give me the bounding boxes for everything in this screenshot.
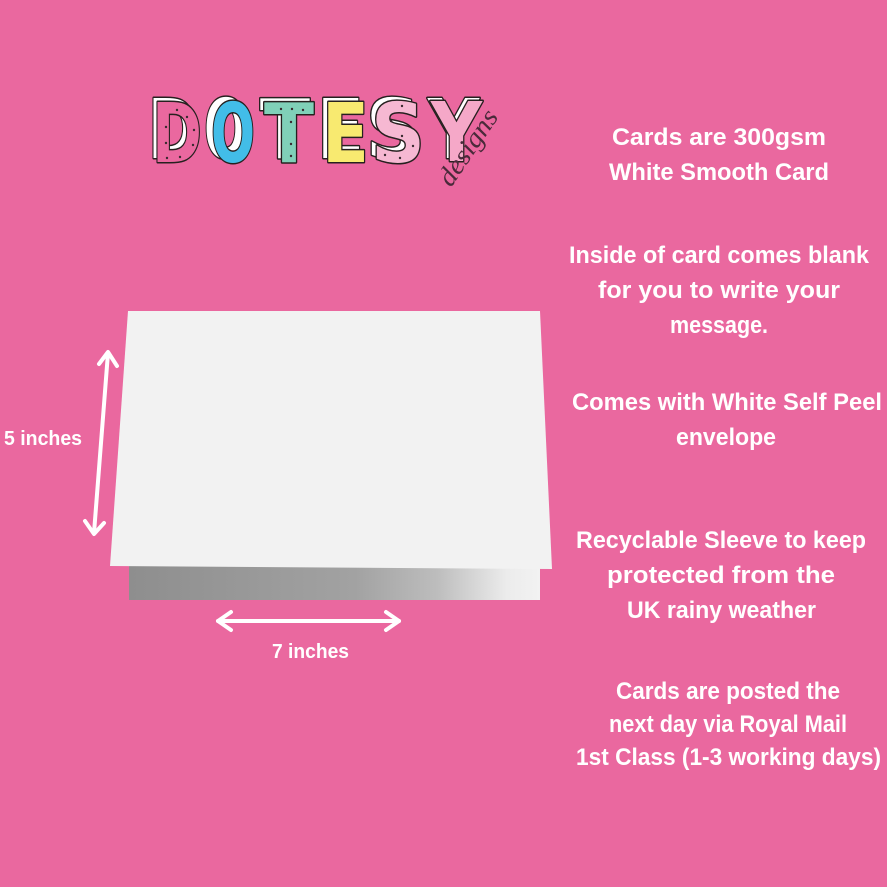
- text block: inside of card: for you to write your: [598, 277, 840, 304]
- logo: Dotesy Designs: [148, 83, 504, 191]
- card inner back page: [129, 560, 540, 600]
- logo letter S: S: [366, 83, 420, 178]
- logo letter O: O: [204, 83, 248, 178]
- logo letter Y: Y: [430, 86, 483, 181]
- logo letter D: D: [148, 83, 198, 178]
- logo script word: designs: designs: [431, 103, 504, 191]
- text block: card stock: White Smooth Card: [609, 159, 829, 186]
- logo letter T: T: [260, 83, 310, 178]
- logo letter T: T: [264, 87, 314, 182]
- logo letter S: S: [371, 87, 425, 182]
- height arrow: [85, 352, 117, 534]
- text block: envelope: envelope: [676, 424, 776, 451]
- logo letter E: E: [322, 87, 369, 182]
- card front cover: [110, 311, 552, 569]
- text block: inside of card: message.: [670, 312, 768, 339]
- logo letter Y: Y: [427, 83, 480, 178]
- text block: recyclable sleeve: UK rainy weather: [627, 597, 816, 624]
- text block: card stock: [609, 124, 829, 186]
- logo dots: [165, 105, 414, 159]
- text block: postage: next day via Royal Mail: [609, 711, 847, 738]
- text block: card stock: Cards are 300gsm: [612, 124, 826, 151]
- label: 5 inches: 5 inches: [4, 428, 82, 450]
- logo letter E: E: [317, 83, 364, 178]
- text block: postage: [576, 678, 881, 771]
- text block: envelope: Comes with White Self Peel: [572, 389, 882, 416]
- logo letter O: O: [211, 87, 255, 182]
- text block: postage: Cards are posted the: [616, 678, 840, 705]
- text block: recyclable sleeve: protected from the: [607, 562, 835, 589]
- text block: envelope: [572, 389, 882, 451]
- text block: inside of card: Inside of card comes blank: [569, 242, 870, 269]
- width arrow: [218, 612, 399, 630]
- text block: inside of card: [569, 242, 870, 339]
- text block: recyclable sleeve: Recyclable Sleeve to keep: [576, 527, 866, 554]
- logo letter D: D: [152, 87, 202, 182]
- text block: recyclable sleeve: [576, 527, 866, 624]
- card illustration: [110, 311, 552, 600]
- label: 7 inches: 7 inches: [272, 641, 349, 663]
